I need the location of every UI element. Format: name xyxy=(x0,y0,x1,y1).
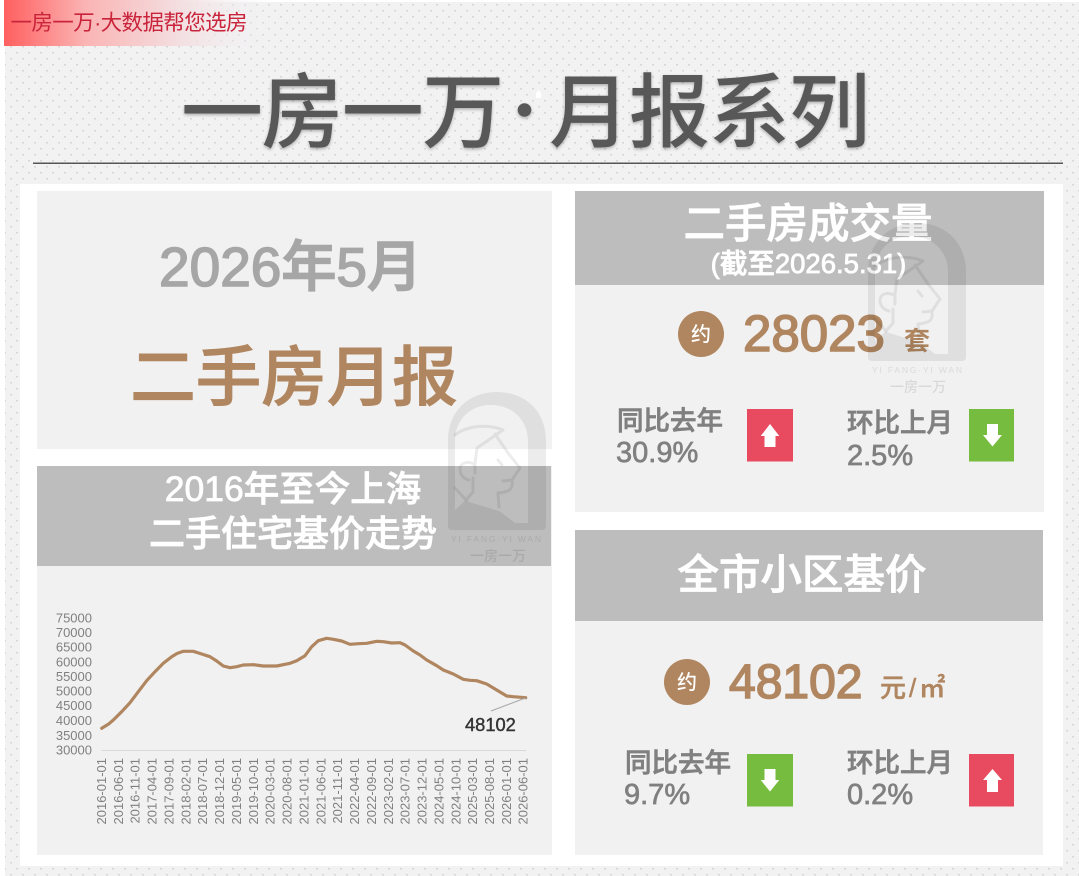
x axis labels xyxy=(94,758,531,824)
x axis labels: 2021-11-01 xyxy=(330,758,345,824)
volume year on year xyxy=(616,406,723,469)
x axis labels: 2022-04-01 xyxy=(347,758,362,824)
watermark: volume side: YI FANG·YI WAN xyxy=(872,365,962,375)
x axis labels: 2024-10-01 xyxy=(448,758,463,824)
y axis labels: 45000 xyxy=(56,698,92,713)
watermark: chart side: 一房一万 xyxy=(470,548,526,564)
y axis labels: 70000 xyxy=(56,625,92,640)
price year on year xyxy=(624,748,731,811)
x axis labels: 2018-02-01 xyxy=(178,758,193,824)
x axis labels: 2016-01-01 xyxy=(94,758,109,824)
title xyxy=(181,68,869,159)
price line xyxy=(102,638,526,728)
watermark: volume side: 一房一万 xyxy=(890,379,946,395)
y axis labels: 30000 xyxy=(56,742,92,758)
volume header: 二手房成交量 xyxy=(683,200,933,247)
price month on month xyxy=(847,748,953,811)
brand tag: 一房一万·大数据帮您选房 xyxy=(10,11,248,35)
y axis labels: 75000 xyxy=(56,610,92,626)
x axis labels: 2018-12-01 xyxy=(212,758,227,824)
base price figure: 约 xyxy=(677,671,697,694)
volume month on month xyxy=(847,408,953,472)
volume month on month: 环比上月 xyxy=(847,408,953,438)
watermark: chart side xyxy=(448,392,546,564)
price month on month: 0.2% xyxy=(847,779,913,811)
x axis labels: 2023-07-01 xyxy=(398,758,413,824)
x axis labels: 2020-08-01 xyxy=(280,758,295,824)
icon: up arrow xyxy=(969,754,1014,806)
icon: down arrow xyxy=(747,754,793,806)
title: 月报系列 xyxy=(549,69,869,159)
y axis labels: 35000 xyxy=(56,728,92,743)
x axis labels: 2022-09-01 xyxy=(364,758,379,824)
title rule xyxy=(33,162,1063,164)
y axis labels: 55000 xyxy=(56,669,92,684)
y axis labels: 40000 xyxy=(56,713,92,728)
latest value callout xyxy=(465,698,526,735)
volume figure: 28023 xyxy=(743,305,885,362)
volume month on month: 2.5% xyxy=(847,440,913,472)
title highlight mark xyxy=(536,90,541,98)
volume figure: 套 xyxy=(904,326,930,356)
panel: report heading xyxy=(37,191,552,449)
y axis labels: 60000 xyxy=(56,654,92,670)
price year on year: 9.7% xyxy=(624,779,690,811)
x axis labels: 2017-09-01 xyxy=(162,758,176,824)
x axis labels: 2018-07-01 xyxy=(195,758,210,824)
price trend header xyxy=(37,466,551,566)
x axis labels: 2021-01-01 xyxy=(296,758,311,824)
base price figure: 元/㎡ xyxy=(880,673,948,703)
panel: base price xyxy=(575,530,1043,855)
x axis labels: 2026-01-01 xyxy=(499,758,514,824)
y axis labels: 65000 xyxy=(56,640,92,654)
volume figure: 约 xyxy=(691,323,711,346)
watermark: chart side: YI FANG·YI WAN xyxy=(451,534,541,544)
white content sheet xyxy=(20,184,1063,866)
price trend header: 二手住宅基价走势 xyxy=(149,513,437,554)
volume year on year: 同比去年 xyxy=(617,406,723,436)
volume figure xyxy=(678,305,930,362)
x axis labels: 2025-03-01 xyxy=(465,758,480,824)
price year on year: 同比去年 xyxy=(625,748,731,778)
x axis labels: 2024-05-01 xyxy=(431,758,446,824)
volume header: (截至2026.5.31) xyxy=(711,248,906,279)
base price figure: 48102 xyxy=(729,656,862,709)
x axis labels: 2023-12-01 xyxy=(414,758,430,824)
x axis labels: 2025-08-01 xyxy=(482,758,497,824)
x axis labels: 2026-06-01 xyxy=(516,758,531,824)
y axis labels xyxy=(56,610,92,758)
base price header xyxy=(575,530,1043,621)
x axis labels: 2020-03-01 xyxy=(263,758,278,824)
panel: price trend xyxy=(37,466,552,855)
price trend header: 2016年至今上海 xyxy=(165,469,421,509)
brand tag xyxy=(4,0,276,46)
title: 一房一万 xyxy=(181,68,503,159)
base price figure xyxy=(664,656,948,709)
volume header xyxy=(575,191,1044,285)
x axis labels: 2019-05-01 xyxy=(229,758,244,824)
report date: 2026年5月 xyxy=(159,236,422,298)
watermark: volume side xyxy=(868,223,966,395)
volume year on year: 30.9% xyxy=(616,437,698,469)
x axis labels: 2016-06-01 xyxy=(111,758,126,824)
icon: down arrow xyxy=(969,409,1014,462)
panel: transaction volume xyxy=(575,191,1044,512)
report title: 二手房月报 xyxy=(130,341,458,414)
y axis labels: 50000 xyxy=(56,684,92,698)
x axis labels: 2019-10-01 xyxy=(246,758,261,824)
x axis labels: 2021-06-01 xyxy=(313,758,328,824)
icon: up arrow xyxy=(747,409,793,462)
x axis labels: 2016-11-01 xyxy=(128,758,143,824)
line chart xyxy=(56,610,531,824)
x axis labels: 2017-04-01 xyxy=(145,758,160,824)
price month on month: 环比上月 xyxy=(847,748,953,778)
base price header: 全市小区基价 xyxy=(677,551,927,598)
latest value callout: 48102 xyxy=(465,714,516,735)
x axis labels: 2023-02-01 xyxy=(381,758,396,824)
